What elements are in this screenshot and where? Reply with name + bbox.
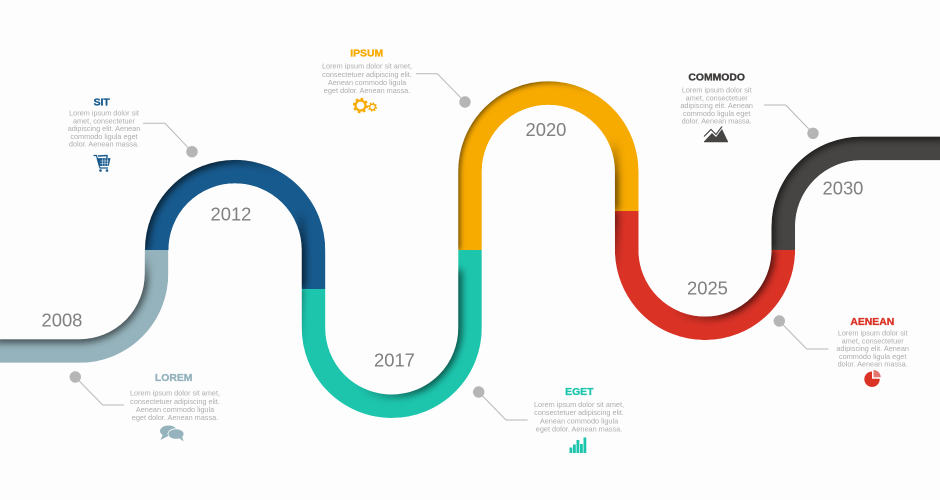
text block: [322, 62, 412, 95]
year label 2017: 2017: [374, 350, 415, 370]
text block: amet, consectetuer: [686, 93, 748, 102]
connector: [416, 74, 471, 108]
connector: [764, 105, 819, 139]
text block: Aenean commodo ligula: [540, 416, 619, 425]
connector: [143, 123, 198, 157]
icon: mountain chart: [704, 126, 728, 142]
icon: bar chart: [570, 438, 586, 453]
road segment: 2008 grey: [0, 250, 156, 351]
callout: Ipsum: [322, 49, 471, 112]
callout: Sit: [68, 97, 198, 172]
text block: Lorem ipsum dolor sit: [69, 109, 139, 118]
text block: Lorem ipsum dolor sit: [682, 86, 752, 95]
text block: eget dolor. Aenean massa.: [132, 413, 218, 422]
text block: commodo ligula eget: [839, 352, 906, 361]
heading: AENEAN: [850, 317, 894, 328]
icon: shopping cart: [94, 156, 110, 172]
callout: Lorem: [70, 371, 220, 442]
year label 2020: 2020: [526, 119, 566, 140]
text block: commodo ligula eget: [70, 132, 138, 141]
callout: Aenean: [774, 315, 909, 387]
text block: Lorem ipsum dolor sit amet,: [322, 62, 412, 71]
connector: [473, 386, 528, 420]
text block: adipiscing elit. Aenean: [836, 344, 909, 353]
connector: [774, 315, 828, 349]
text block: Lorem ipsum dolor sit: [838, 329, 908, 338]
text block: amet, consectetuer: [73, 116, 136, 125]
icon: gears: [354, 99, 376, 112]
text block: [534, 400, 624, 434]
text block: eget dolor. Aenean massa.: [324, 86, 410, 95]
text block: dolor. Aenean massa.: [838, 360, 908, 368]
text block: [130, 389, 220, 422]
text block: dolor. Aenean massa.: [682, 116, 752, 126]
heading: LOREM: [155, 373, 192, 384]
text block: Lorem ipsum dolor sit amet,: [534, 400, 624, 409]
text block: [836, 329, 909, 368]
road segment: 2012 blue: [144, 159, 326, 289]
text block: Lorem ipsum dolor sit amet,: [130, 389, 220, 398]
road segment: 2020 yellow: [457, 80, 640, 250]
text block: adipiscing elit. Aenean: [68, 124, 140, 133]
icon: speech bubbles: [160, 426, 184, 442]
text block: Aenean commodo ligula: [328, 78, 407, 87]
callout: Commodo: [680, 73, 819, 142]
text block: consectetuer adipiscing elit.: [130, 397, 220, 406]
text block: adipiscing elit. Aenean: [680, 101, 753, 110]
heading: COMMODO: [688, 73, 745, 84]
connector: [70, 371, 124, 405]
text block: Aenean commodo ligula: [136, 405, 215, 414]
heading: SIT: [94, 97, 110, 108]
text block: eget dolor. Aenean massa.: [536, 424, 622, 434]
road segment: 2025 red: [614, 211, 783, 328]
text block: commodo ligula eget: [683, 109, 750, 118]
year label 2025: 2025: [687, 278, 728, 298]
text block: [68, 109, 140, 148]
year label 2012: 2012: [210, 204, 251, 225]
text block: consectetuer adipiscing elit.: [322, 70, 412, 79]
text block: dolor. Aenean massa.: [69, 140, 139, 148]
year label 2008: 2008: [42, 310, 82, 330]
road segment: 2030 black: [770, 136, 940, 250]
year label 2030: 2030: [822, 178, 863, 198]
road segment: 2017 teal: [301, 250, 470, 406]
text block: consectetuer adipiscing elit.: [534, 408, 624, 417]
text block: amet, consectetuer: [842, 336, 904, 345]
icon: pie chart: [864, 370, 881, 387]
callout: Eget: [473, 386, 624, 453]
heading: IPSUM: [350, 49, 383, 60]
text block: [680, 86, 753, 126]
heading: EGET: [565, 387, 594, 398]
